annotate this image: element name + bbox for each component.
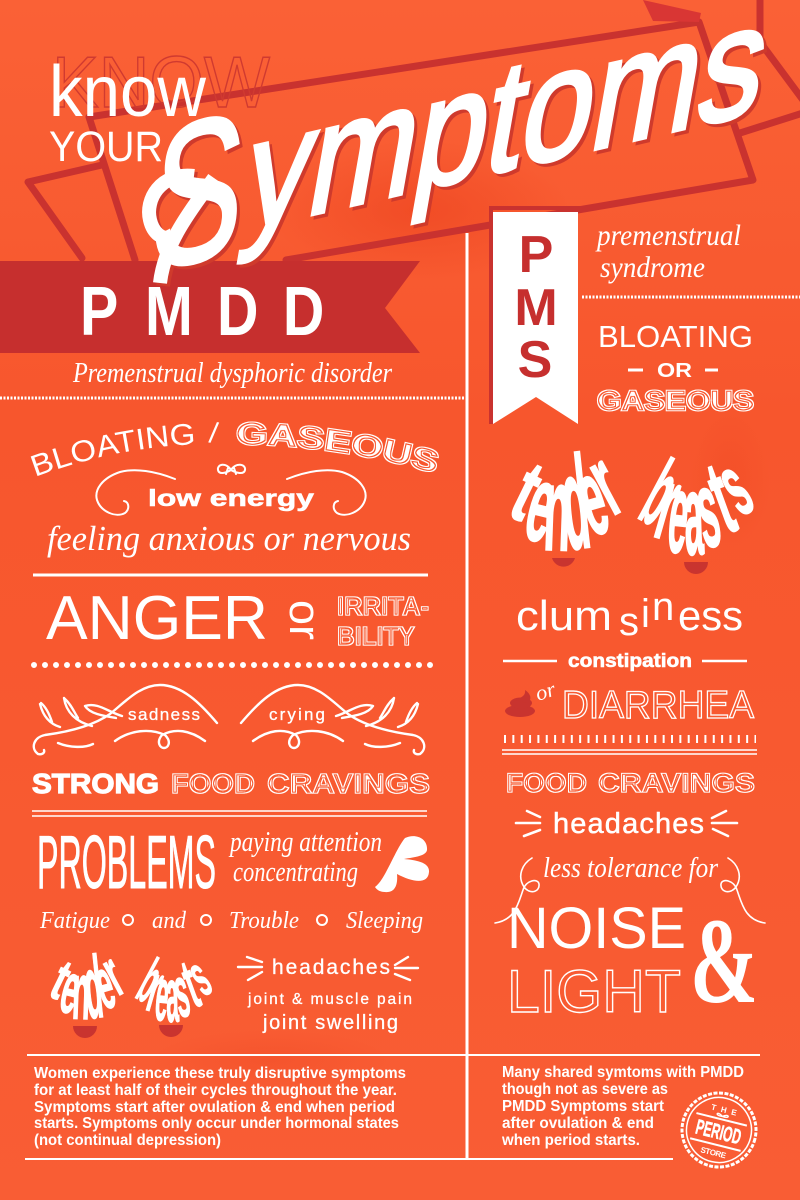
PMDD: headaches and joints: joint swelling (262, 1012, 398, 1034)
clumsiness: clum (516, 592, 612, 639)
footer text: PMDD (34, 1065, 406, 1149)
PMDD: headaches and joints (238, 956, 418, 1034)
anger or irritability: or (280, 600, 329, 640)
panel: PMS ribbon: S (518, 331, 552, 389)
PMS subtitle: premenstrual (595, 219, 741, 252)
divider (33, 574, 428, 576)
or diarrhea: or (532, 676, 559, 706)
PMS: food cravings (506, 768, 755, 798)
clumsiness: n (652, 585, 674, 629)
stamp: the period store (674, 1085, 764, 1175)
ornament: knot (218, 465, 245, 474)
PMDD: headaches and joints: joint & muscle pain (247, 991, 412, 1008)
PMDD: tender breasts: a (164, 952, 180, 1038)
PMS: bloating or gaseous: GASEOUS (597, 385, 754, 416)
low energy: low energy (148, 485, 314, 511)
PMS: tender breasts: e (663, 450, 695, 577)
anger or irritability (46, 584, 429, 653)
panel: PMS ribbon (491, 208, 582, 424)
dotted divider (34, 662, 432, 668)
fatigue and trouble sleeping (39, 908, 423, 934)
PMS: tender breasts: r (645, 446, 692, 562)
less tolerance for: less tolerance for (543, 852, 719, 884)
anger or irritability: IRRITA- (337, 591, 429, 621)
footer text: PMS (501, 1064, 744, 1149)
footer text: PMDD: Women experience these truly disruptive symptoms (34, 1065, 406, 1082)
feeling anxious or nervous: feeling anxious or nervous (47, 519, 411, 558)
title: know your (49, 43, 270, 171)
icons: large nipples (552, 558, 708, 574)
title: Symptoms: S (148, 72, 255, 319)
noise and light: & (690, 894, 758, 1029)
fatigue and trouble sleeping: Fatigue (39, 908, 110, 934)
problems paying attention: PROBLEMS (37, 820, 216, 904)
PMDD: bloating gaseous arc (30, 417, 439, 476)
sadness and crying ornaments: sadness (128, 705, 200, 724)
noise and light: LIGHT (507, 958, 681, 1025)
PMS: tender breasts: n (542, 442, 573, 577)
strong food cravings: CRAVINGS (267, 768, 430, 799)
footer text: PMDD: starts. Symptoms only occur under hormonal states (34, 1115, 399, 1132)
stamp: the period store: THE (710, 1103, 738, 1118)
clumsiness: s (619, 600, 639, 644)
PMDD: tender breasts: n (71, 946, 92, 1036)
footer text: PMDD: for at least half of their cycles throughout the year. (34, 1082, 397, 1099)
icon: poop (505, 690, 535, 717)
footer text: PMS: after ovulation & end (502, 1115, 654, 1132)
clumsiness: i (641, 592, 650, 636)
noise and light (507, 894, 758, 1029)
stamp: the period store: STORE (700, 1145, 728, 1160)
fatigue and trouble sleeping: Trouble (229, 908, 299, 934)
PMS: bloating or gaseous: BLOATING (598, 319, 753, 354)
ribbon banner outline (28, 0, 800, 260)
PMS: tender breasts: d (555, 427, 596, 577)
stamp: the period store: PERIOD (693, 1116, 743, 1149)
PMS: food cravings: CRAVINGS (598, 768, 755, 798)
PMDD: tender breasts: s (168, 952, 195, 1033)
PMS: food cravings: FOOD (506, 768, 587, 798)
footer text: PMS: PMDD Symptoms start (502, 1098, 665, 1115)
footer text: PMDD: (not continual depression) (34, 1132, 221, 1149)
PMS subtitle (595, 219, 741, 284)
panel: PMDD banner: PMDD (80, 272, 324, 350)
title: Symptoms: S (145, 69, 252, 316)
PMS: tender breasts: r (570, 430, 638, 535)
PMS: tender breasts: t (694, 440, 747, 554)
PMS: tender breasts: e (564, 437, 620, 559)
strong food cravings (32, 768, 430, 799)
icons: small nipples (73, 1025, 183, 1038)
PMDD: bloating gaseous arc: BLOATING (30, 424, 194, 476)
PMS: tender breasts (497, 427, 767, 579)
ornament: swirl around low energy (96, 470, 366, 515)
title: know your: know (49, 52, 207, 132)
PMS: tender breasts: s (687, 449, 728, 572)
strong food cravings: STRONG (32, 768, 159, 799)
PMDD: tender breasts: b (127, 947, 172, 1016)
PMDD: tender breasts: t (173, 947, 208, 1023)
anger or irritability: ANGER (46, 584, 268, 653)
PMS: headaches (516, 808, 737, 840)
title: know your: YOUR (49, 123, 163, 171)
PMS: tender breasts: s (701, 439, 767, 534)
PMDD: tender breasts: d (80, 938, 107, 1037)
sadness and crying ornaments: crying (269, 705, 325, 724)
footer text: PMDD: Symptoms start after ovulation & end when period (34, 1099, 395, 1116)
PMS: tender breasts: b (626, 442, 694, 546)
clumsiness: ess (678, 592, 743, 639)
PMS subtitle: syndrome (600, 251, 705, 284)
PMDD: tender breasts: s (176, 944, 221, 1008)
PMS: tender breasts: t (497, 444, 556, 539)
PMDD: tender breasts: e (53, 947, 89, 1029)
anger or irritability: BILITY (337, 621, 415, 651)
PMS: bloating or gaseous: OR (657, 360, 693, 382)
or diarrhea: DIARRHEA (562, 684, 754, 727)
PMDD: bloating gaseous arc: / (207, 417, 221, 450)
sadness and crying ornaments (34, 685, 424, 754)
PMS: tender breasts: e (515, 443, 568, 566)
PMDD: tender breasts: t (41, 948, 80, 1012)
footer text: PMS: Many shared symtoms with PMDD (502, 1064, 744, 1081)
PMDD: tender breasts: e (152, 952, 173, 1037)
PMDD: tender breasts (41, 938, 221, 1038)
problems paying attention: concentrating (233, 857, 358, 888)
PMDD: headaches and joints: headaches (272, 956, 390, 979)
fatigue and trouble sleeping: Sleeping (346, 908, 423, 934)
PMS: tender breasts: a (682, 451, 706, 579)
panel: PMS ribbon: M (514, 279, 558, 337)
double divider (32, 811, 427, 816)
title: know your: KNOW (52, 43, 270, 123)
PMS: bloating or gaseous (597, 319, 754, 416)
footer text: PMS: though not as severe as (502, 1081, 668, 1098)
PMDD subtitle: Premenstrual dysphoric disorder (72, 357, 393, 389)
fatigue and trouble sleeping: and (152, 908, 187, 934)
clumsiness (516, 585, 743, 644)
PMS: headaches: headaches (553, 808, 704, 840)
problems paying attention: paying attention (228, 827, 382, 858)
PMDD: tender breasts: e (86, 943, 123, 1025)
PMDD: bloating gaseous arc: GASEOUS (236, 422, 439, 472)
PMDD: tender breasts: r (140, 950, 171, 1028)
panel: PMS ribbon: P (519, 226, 553, 284)
footer text: PMS: when period starts. (501, 1132, 640, 1149)
tick divider (502, 739, 757, 754)
PMDD: tender breasts: r (90, 939, 136, 1010)
icon: petal shape (375, 836, 429, 892)
less tolerance for (495, 852, 765, 923)
constipation: constipation (568, 651, 692, 672)
column dividers (0, 233, 800, 1159)
strong food cravings: FOOD (171, 768, 255, 799)
panel: PMDD banner (0, 261, 420, 353)
noise and light: NOISE (507, 896, 686, 961)
